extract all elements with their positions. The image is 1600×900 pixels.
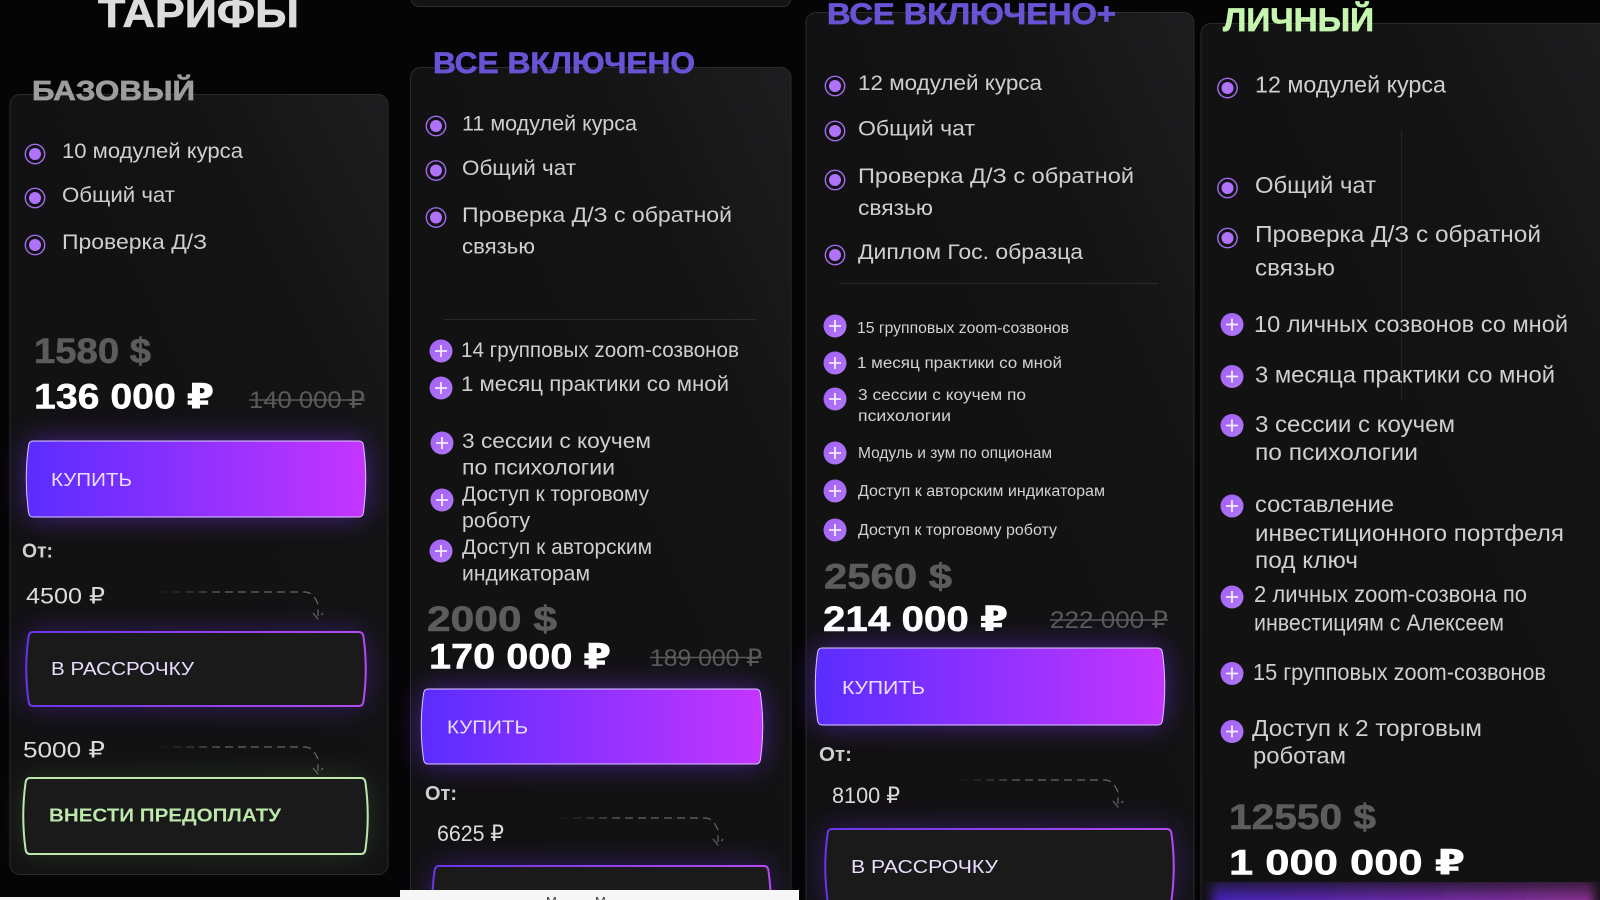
feature list: личный: Проверка Д/З с обратной <box>1255 221 1541 247</box>
price: базовый: 1580 $ <box>34 332 151 371</box>
feature list: все включено <box>426 112 732 258</box>
price: все включено <box>427 600 762 676</box>
button: в рассрочку: В РАССРОЧКУ <box>851 857 999 877</box>
plan name: личный: ЛИЧНЫЙ <box>1223 2 1374 38</box>
panel: все включено плюс <box>806 0 1194 900</box>
feature list: все включено: Проверка Д/З с обратной <box>462 204 732 227</box>
extras list: личный: инвестициям с Алексеем <box>1254 610 1504 636</box>
prepayment amount: 5000 ₽ <box>23 738 105 762</box>
extras list: личный: 2 личных zoom-созвона по <box>1254 581 1527 607</box>
panel: личный <box>1201 2 1600 900</box>
feature list: все включено плюс: Проверка Д/З с обратной <box>858 165 1134 188</box>
price: все включено плюс: 2560 $ <box>824 558 952 596</box>
feature list: все включено плюс: связью <box>858 197 933 220</box>
feature list: базовый: 10 модулей курса <box>62 140 243 163</box>
feature list: все включено: Общий чат <box>462 157 576 180</box>
extras list: личный: 10 личных созвонов со мной <box>1254 311 1568 337</box>
extras list: все включено плюс: Доступ к авторским индикаторам <box>858 483 1105 500</box>
button: в рассрочку: В РАССРОЧКУ <box>51 659 195 679</box>
price: личный: 1 000 000 ₽ <box>1229 844 1465 882</box>
extras list: все включено: роботу <box>462 510 530 532</box>
extras list: все включено: 14 групповых zoom-созвонов <box>461 339 739 362</box>
extras list: личный: составление <box>1255 491 1394 517</box>
extras list: все включено <box>430 339 739 586</box>
extras list: все включено плюс <box>824 314 1105 542</box>
button: купить <box>815 648 1165 725</box>
feature list: личный: 12 модулей курса <box>1255 72 1446 98</box>
extras list: личный: 3 месяца практики со мной <box>1255 362 1555 388</box>
feature list: базовый: Проверка Д/З <box>62 231 207 254</box>
extras list: личный: 3 сессии с коучем <box>1255 411 1455 437</box>
price: все включено плюс <box>823 558 1168 639</box>
arrow: dashed <box>160 592 323 619</box>
button: купить <box>26 441 366 517</box>
extras list: личный <box>1220 311 1568 768</box>
extras list: все включено плюс: 3 сессии с коучем по <box>858 387 1026 404</box>
extras list: личный: под ключ <box>1255 547 1358 573</box>
extras list: личный: Доступ к 2 торговым <box>1252 715 1482 741</box>
plan name: базовый: БАЗОВЫЙ <box>32 74 195 106</box>
label: от: От: <box>819 744 852 766</box>
button: купить: КУПИТЬ <box>51 470 132 490</box>
arrow: dashed <box>560 818 723 845</box>
price: все включено: 2000 $ <box>427 600 557 639</box>
plan name: все включено: ВСЕ ВКЛЮЧЕНО <box>433 47 695 80</box>
extras list: все включено плюс: 15 групповых zoom-созвонов <box>857 320 1069 337</box>
button: купить: КУПИТЬ <box>447 718 528 738</box>
price: все включено: 189 000 ₽ <box>650 645 762 672</box>
price: базовый <box>34 332 365 416</box>
panel: базовый <box>10 0 388 874</box>
label: от: От: <box>425 783 457 805</box>
extras list: все включено: Доступ к авторским <box>462 536 652 559</box>
price: все включено: 170 000 ₽ <box>429 638 611 676</box>
feature list: базовый: Общий чат <box>62 184 175 207</box>
extras list: личный: 15 групповых zoom-созвонов <box>1253 659 1546 685</box>
installment amount: 8100 ₽ <box>832 783 900 808</box>
installment amount: 4500 ₽ <box>26 584 105 608</box>
extras list: все включено: Доступ к торговому <box>462 483 649 506</box>
extras list: все включено: 1 месяц практики со мной <box>461 373 729 396</box>
button: внести предоплату: ВНЕСТИ ПРЕДОПЛАТУ <box>49 806 282 826</box>
feature list: все включено плюс: Общий чат <box>858 118 975 140</box>
extras list: все включено плюс: Доступ к торговому роботу <box>858 522 1057 539</box>
button: в рассрочку <box>825 829 1174 900</box>
price: все включено плюс: 214 000 ₽ <box>823 600 1008 639</box>
feature list: личный: Общий чат <box>1255 172 1376 198</box>
label: от: От: <box>22 540 53 562</box>
button: в рассрочку <box>432 866 771 900</box>
feature list: все включено: 11 модулей курса <box>462 112 637 136</box>
extras list: все включено плюс: Модуль и зум по опционам <box>858 445 1052 462</box>
arrow: dashed <box>160 747 323 774</box>
extras list: личный: роботам <box>1253 742 1346 768</box>
extras list: все включено плюс: 1 месяц практики со мной <box>857 355 1062 372</box>
price: все включено плюс: 222 000 ₽ <box>1050 607 1168 634</box>
white strip: left <box>0 897 400 900</box>
extras list: все включено: по психологии <box>462 456 615 480</box>
extras list: все включено плюс: психологии <box>858 408 951 425</box>
feature list: все включено: связью <box>462 236 535 258</box>
button: купить: КУПИТЬ <box>842 678 925 698</box>
arrow: dashed <box>960 780 1123 807</box>
button: в рассрочку <box>26 632 366 706</box>
feature list: все включено плюс: Диплом Гос. образца <box>858 241 1083 264</box>
extras list: все включено: индикаторам <box>462 562 590 586</box>
feature list: все включено плюс <box>825 72 1134 265</box>
price: личный: 12550 $ <box>1229 798 1376 837</box>
price: базовый: 136 000 ₽ <box>34 378 214 416</box>
extras list: все включено: 3 сессии с коучем <box>462 430 651 453</box>
feature list: все включено плюс: 12 модулей курса <box>858 72 1042 95</box>
feature list: базовый <box>25 140 243 255</box>
white strip: center <box>400 890 799 900</box>
feature list: личный <box>1218 72 1541 280</box>
installment amount: 6625 ₽ <box>437 821 504 846</box>
button: внести предоплату <box>23 778 368 854</box>
extras list: личный: по психологии <box>1255 439 1418 465</box>
price: базовый: 140 000 ₽ <box>249 387 365 414</box>
panel: все включено <box>410 47 791 900</box>
button: купить <box>421 689 763 764</box>
feature list: личный: связью <box>1255 254 1335 280</box>
price: личный <box>1229 798 1465 882</box>
panel: previous card stub <box>411 0 791 6</box>
button glow: личный <box>1201 882 1600 900</box>
extras list: личный: инвестиционного портфеля <box>1255 520 1564 546</box>
